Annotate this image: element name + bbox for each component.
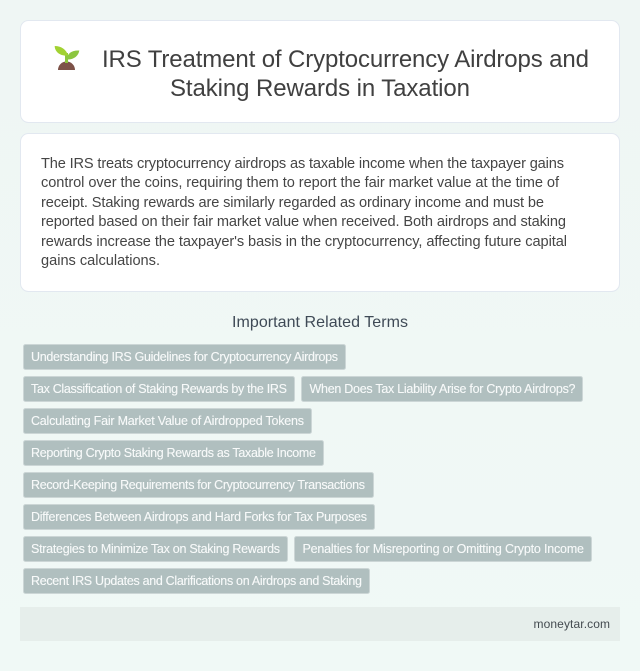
panel: related term tags: [24, 344, 592, 594]
tag: [24, 568, 370, 594]
title: Staking Rewards in Taxation: [170, 75, 470, 102]
text block: description: rewards increase the taxpayer's basis in the cryptocurrency, affecting future capital: [41, 234, 567, 250]
tag: [24, 344, 346, 370]
panel: description: [20, 134, 620, 292]
text block: description: The IRS treats cryptocurrency airdrops as taxable income when the taxpayer gains: [41, 156, 564, 172]
tag: Record-Keeping Requirements for Cryptocurrency Transactions: [31, 478, 365, 492]
tag: Reporting Crypto Staking Rewards as Taxable Income: [31, 446, 316, 460]
text block: description: control over the coins, requiring them to report the fair market value at the time of: [41, 175, 560, 191]
tag: Penalties for Misreporting or Omitting Crypto Income: [302, 542, 584, 556]
tag: [24, 376, 294, 402]
tag: [24, 504, 374, 530]
title: IRS Treatment of Cryptocurrency Airdrops and: [102, 46, 589, 73]
icon: seedling: [55, 46, 79, 70]
tag: Tax Classification of Staking Rewards by the IRS: [31, 382, 287, 396]
tag: Strategies to Minimize Tax on Staking Rewards: [31, 542, 280, 556]
tag: Recent IRS Updates and Clarifications on Airdrops and Staking: [31, 574, 362, 588]
title: [102, 46, 589, 102]
tag: Calculating Fair Market Value of Airdropped Tokens: [31, 414, 304, 428]
footer: moneytar.com: [534, 617, 610, 631]
tag: Understanding IRS Guidelines for Cryptocurrency Airdrops: [31, 350, 338, 364]
tag: [24, 472, 374, 498]
tag: Differences Between Airdrops and Hard Forks for Tax Purposes: [31, 510, 367, 524]
text block: description: [41, 156, 567, 269]
tag: When Does Tax Liability Arise for Crypto Airdrops?: [310, 382, 576, 396]
text block: description: gains calculations.: [41, 253, 160, 269]
tag: [294, 536, 592, 562]
tag: [302, 376, 582, 402]
tag: [24, 536, 288, 562]
panel: title card: [20, 20, 620, 122]
tag: [24, 408, 312, 434]
text block: description: reported based on their fair market value when received. Both airdrops and staking: [41, 214, 566, 230]
heading: related terms: Important Related Terms: [232, 314, 408, 331]
text block: description: receipt. Staking rewards are similarly regarded as ordinary income and must be: [41, 195, 544, 211]
tag: [24, 440, 324, 466]
footer: [20, 607, 620, 641]
